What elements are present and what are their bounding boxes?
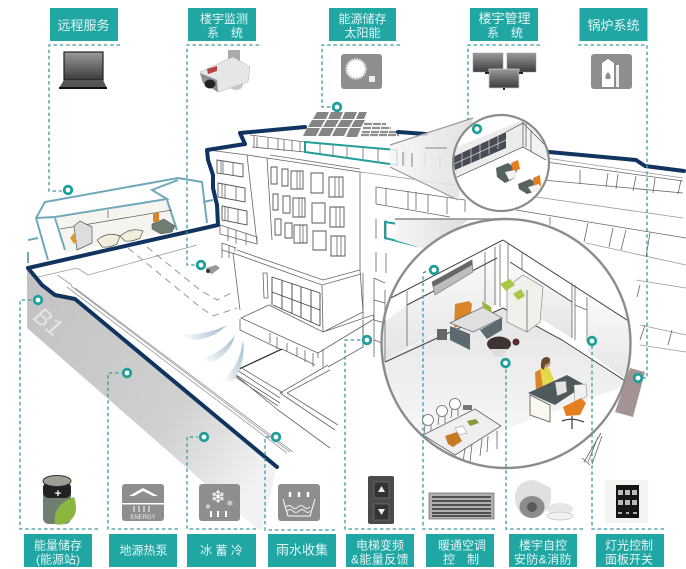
callout: ice storage — [187, 433, 256, 567]
small building camera — [206, 265, 220, 274]
building: central facade — [267, 155, 360, 272]
zoom circle: building management room — [450, 115, 560, 211]
navy roof outline — [28, 127, 684, 467]
callout: elevator: &能量反馈 — [351, 552, 409, 566]
building: right long wing — [360, 158, 686, 352]
copier — [500, 275, 543, 332]
icon: snow: ❄ — [205, 503, 211, 511]
callout: building automation: 安防&消防 — [514, 552, 572, 566]
B1 basement wall — [27, 270, 277, 530]
icon: battery — [43, 476, 76, 525]
callout: building management: 系 统 — [487, 26, 523, 40]
solar panels — [303, 112, 399, 137]
icon: snow: ❄ — [210, 487, 226, 508]
callout: lighting control: 面板开关 — [605, 552, 653, 566]
ceiling speaker — [487, 336, 520, 357]
callout: building monitoring — [187, 8, 259, 269]
callout: ground source heat pump: 地源热泵 — [119, 544, 168, 558]
icon: rain — [278, 484, 320, 521]
icon: heat pump: ENERGY — [130, 515, 156, 521]
meeting table — [422, 398, 501, 462]
icon: heat pump — [122, 484, 164, 521]
building: left tower wing — [208, 150, 272, 258]
callout: energy storage — [20, 296, 98, 567]
building: entrance steps — [233, 349, 338, 448]
callout: elevator — [345, 336, 415, 567]
callout: boiler system — [578, 8, 648, 382]
office walls — [380, 240, 632, 384]
office desk — [437, 301, 502, 350]
callout: solar energy storage: 太阳能 — [344, 25, 381, 40]
exterior door — [582, 368, 645, 465]
zoom circle: office interior — [380, 219, 632, 470]
operator desks — [496, 160, 541, 194]
main building — [182, 135, 686, 448]
icon: monitors — [473, 53, 536, 90]
callout: remote service — [49, 8, 120, 194]
icon: boiler — [591, 54, 632, 89]
callout: lighting control — [588, 337, 664, 567]
callout: building automation: 楼宇自控 — [519, 538, 567, 552]
fan air streams — [182, 325, 244, 382]
woman at desk — [528, 357, 587, 429]
callout: building monitoring: 楼宇监测 — [200, 11, 248, 26]
callout: building management — [468, 8, 540, 133]
callout: ice storage: 冰 蓄 冷 — [200, 544, 243, 558]
office floor — [384, 308, 624, 436]
rooftop remote service room — [28, 178, 213, 263]
icon: elevator buttons — [368, 476, 394, 524]
callout: rainwater collection — [265, 433, 336, 567]
callout: rainwater collection: 雨水收集 — [276, 542, 328, 558]
callout: building monitoring: 系 统 — [207, 26, 243, 40]
callout: building management: 楼宇管理 — [478, 11, 531, 26]
B1 label: B1 — [27, 304, 69, 341]
icon: snow — [199, 484, 240, 521]
callout: energy storage: 能量储存 — [34, 538, 82, 552]
callout: boiler system: 锅炉系统 — [587, 18, 640, 33]
icon: snow: ❄ — [227, 499, 233, 508]
zoom cone to office — [395, 219, 506, 250]
icon: solar — [341, 54, 382, 89]
icon: dome camera — [515, 480, 573, 520]
callout: solar energy storage — [322, 8, 400, 111]
zoom cone to building management room — [390, 118, 473, 200]
callout: solar energy storage: 能源储存 — [338, 11, 387, 26]
callout: HVAC control: 暖通空调 — [438, 538, 486, 552]
building: side column by entrance — [363, 273, 385, 357]
callout: HVAC control — [423, 266, 495, 567]
facade windows — [271, 167, 345, 256]
video wall — [453, 132, 506, 170]
building: rooftop parapet — [248, 135, 440, 167]
callout: lighting control: 灯光控制 — [605, 538, 653, 552]
icon: light panel — [605, 480, 648, 523]
callout: elevator: 电梯变频 — [356, 538, 404, 552]
callout: energy storage: (能源站) — [36, 552, 80, 566]
driveway and ramp lines — [38, 245, 293, 453]
air conditioner — [432, 260, 473, 295]
callout: HVAC control: 控 制 — [443, 552, 479, 566]
icon: battery: + — [55, 488, 61, 500]
building: lower entrance block — [233, 250, 363, 332]
building: canopy and columns — [240, 305, 374, 367]
room equipment — [70, 213, 175, 250]
callout: ground source heat pump — [108, 369, 178, 567]
teal window highlights — [305, 142, 417, 246]
icon: vent — [429, 493, 494, 519]
icon: laptop — [59, 52, 107, 89]
callout: building automation — [502, 359, 583, 567]
callout: remote service: 远程服务 — [57, 18, 110, 33]
icon: surveillance camera — [200, 50, 250, 92]
